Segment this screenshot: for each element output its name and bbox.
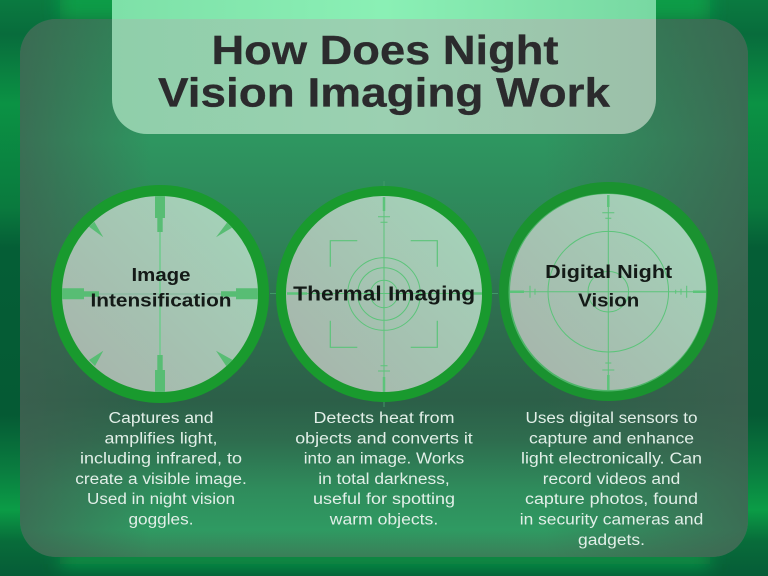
text block: thermal imaging description: useful for spotting	[313, 491, 455, 508]
text block: digital night vision description: Uses digital sensors to	[526, 410, 698, 427]
text block: image intensification description: goggles.	[128, 512, 194, 528]
label: thermal imaging: Thermal Imaging	[293, 284, 475, 306]
text block: image intensification description: including infrared, to	[80, 451, 242, 468]
scope: digital night vision	[499, 182, 718, 401]
text block: digital night vision description: record videos and	[543, 471, 680, 488]
text block: image intensification description: Used in night vision	[87, 491, 235, 508]
text block: thermal imaging description: in total darkness,	[318, 471, 450, 488]
label: image intensification	[90, 265, 232, 310]
text block: image intensification description: Captures and	[108, 410, 214, 427]
title text: Vision Imaging Work	[158, 70, 610, 116]
reticle: image intensification	[60, 194, 260, 394]
text block: thermal imaging description: Detects heat from	[314, 410, 454, 427]
text block: digital night vision description: gadgets.	[578, 532, 645, 549]
text block: image intensification description	[75, 410, 247, 528]
text block: thermal imaging description: warm objects.	[329, 512, 438, 528]
text block: image intensification description: create a visible image.	[75, 471, 247, 488]
text block: thermal imaging description: objects and converts it	[295, 430, 474, 447]
reticle: thermal imaging	[287, 197, 482, 392]
text block: thermal imaging description: into an image. Works	[304, 451, 465, 468]
text block: digital night vision description: capture and enhance	[529, 430, 694, 447]
label: digital night vision	[545, 262, 672, 310]
text block: digital night vision description	[520, 410, 703, 549]
text block: digital night vision description: capture photos, found	[525, 491, 698, 508]
scope: thermal imaging	[270, 181, 498, 407]
text block: digital night vision description: light electronically. Can	[521, 451, 702, 468]
text block: image intensification description: amplifies light,	[104, 430, 218, 447]
label: digital night vision: Vision	[578, 290, 639, 310]
title text	[158, 27, 610, 116]
label: image intensification: Intensification	[90, 290, 232, 310]
reticle: digital night vision	[510, 195, 706, 390]
label: digital night vision: Digital Night	[545, 262, 672, 282]
label: image intensification: Image	[132, 265, 190, 285]
title banner	[112, 0, 656, 134]
text block: digital night vision description: in security cameras and	[520, 512, 703, 528]
title text: How Does Night	[212, 27, 559, 73]
scope: image intensification	[51, 185, 269, 403]
text block: thermal imaging description	[295, 410, 474, 528]
